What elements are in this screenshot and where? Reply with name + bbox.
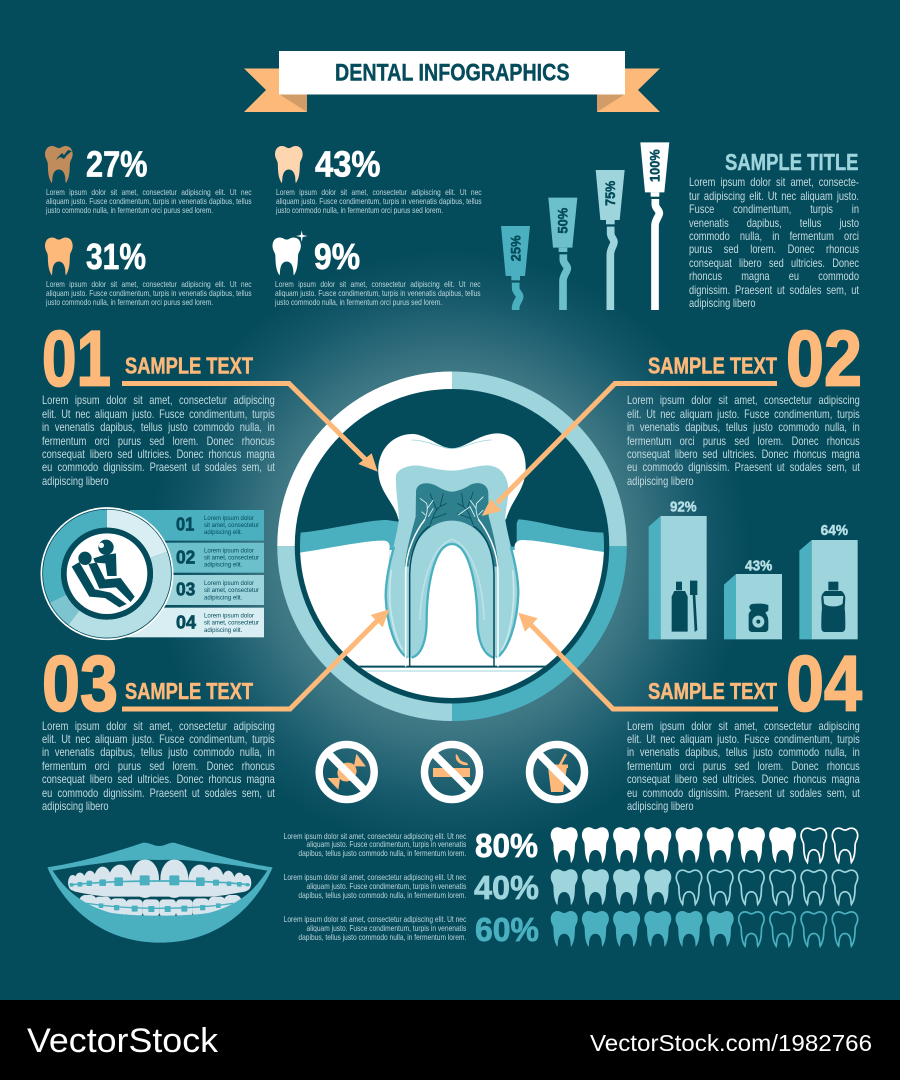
list band 03: adipiscing elit. [204, 594, 242, 601]
section 03 paragraph: eu commodo dignissim. Praesent ut sodales sem, ut [42, 787, 275, 800]
tube 100% [640, 142, 669, 310]
sample title paragraph [689, 176, 859, 310]
list band 04 [127, 608, 264, 637]
tooth row 80% [475, 827, 858, 864]
stat: 9% white tooth: 9% [314, 236, 360, 277]
section 04 heading: SAMPLE TEXT [648, 678, 777, 704]
tooth row text 40% [284, 872, 467, 900]
stat: 43% tooth [275, 144, 380, 185]
central radial glow [0, 230, 900, 870]
tube 25% [501, 226, 530, 310]
list band 01: adipiscing elit. [204, 529, 242, 536]
enamel crown [378, 433, 526, 519]
arrow 04 [518, 613, 778, 709]
list band 03: 03 [176, 579, 195, 600]
list band 01: Lorem ipsum dolor [204, 515, 255, 522]
stat text 27%: aliquam justo. Fusce condimentum, turpis in venenatis dapibus, tellus [46, 196, 252, 206]
section 03 heading [42, 638, 253, 728]
upper teeth [68, 859, 251, 898]
icon: dental chair [72, 540, 135, 607]
pulp [405, 483, 499, 567]
donut chart [41, 508, 173, 639]
section 03 paragraph [42, 720, 275, 813]
section 04 heading [648, 638, 862, 728]
list band 01: sit amet, consectetur [204, 522, 260, 529]
sample title paragraph: rhoncus magna eu commodo [689, 270, 859, 283]
footer bar: VectorStock [27, 1022, 219, 1060]
list band 02: 02 [176, 546, 195, 567]
title banner: DENTAL INFOGRAPHICS [335, 60, 570, 87]
tooth row 80%: 80% [475, 827, 538, 864]
section 01 heading: 01 [42, 314, 111, 402]
sample title heading: SAMPLE TITLE [725, 149, 858, 175]
list band 02 [130, 543, 264, 573]
braces [70, 875, 250, 912]
tooth cross-section [300, 433, 604, 700]
tube 100%: 100% [647, 149, 663, 182]
tooth row 60%: 60% [475, 911, 539, 948]
sample title paragraph: Lorem ipsum dolor sit amet, consecte- [689, 176, 859, 189]
sample title paragraph: dignissim. Praesent ut sodales sem, ut [689, 284, 859, 297]
tooth row text 40%: Lorem ipsum dolor sit amet, consectetur adipiscing elit. Ut nec [284, 872, 467, 882]
section 02 paragraph: in venenatis dapibus, tellus justo commodo nulla, in [627, 421, 860, 434]
tooth row 40%: 40% [474, 869, 539, 906]
nerve baseline [358, 666, 546, 668]
donut list panel [41, 508, 264, 639]
tube 25%: 25% [507, 235, 523, 261]
section 04 paragraph: elit. Ut nec aliquam justo. Fusce condimentum, turpis [627, 733, 860, 746]
section 03 heading: SAMPLE TEXT [125, 678, 253, 704]
section 03 paragraph: fermentum orci purus sed lorem. Donec rhoncus [42, 760, 275, 773]
bar 92% toothpaste [649, 500, 707, 639]
section 01 paragraph: consequat libero sed ultricies. Donec rhoncus magna [42, 448, 275, 461]
section 03 paragraph: in venenatis dapibus, tellus justo commodo nulla, in [42, 746, 275, 759]
section 01 paragraph [42, 394, 275, 488]
list band 02: adipiscing elit. [204, 562, 242, 569]
sample title paragraph: commodo nulla, in fermentum orci [689, 230, 859, 243]
stat: 27% decayed tooth: 27% [86, 144, 148, 185]
section 01 paragraph: in venenatis dapibus, tellus justo commodo nulla, in [42, 421, 275, 434]
tooth row text 60% [284, 914, 467, 942]
stat text 43%: Lorem ipsum dolor sit amet, consectetur adipiscing elit. Ut nec [276, 187, 482, 197]
tube 50% [548, 198, 577, 310]
section 04 paragraph: adipiscing libero [627, 800, 694, 813]
ring quadrants [286, 380, 618, 712]
tooth row text 60%: Lorem ipsum dolor sit amet, consectetur adipiscing elit. Ut nec [284, 914, 467, 924]
no candy icon [319, 744, 374, 800]
list band 04: adipiscing elit. [204, 627, 242, 634]
section 02 heading [648, 314, 862, 402]
lips [47, 843, 273, 943]
section 04 paragraph: fermentum orci purus sed lorem. Donec rhoncus [627, 760, 860, 773]
section 01 paragraph: fermentum orci purus sed lorem. Donec rhoncus [42, 435, 275, 448]
tube 75%: 75% [602, 180, 618, 206]
stat text 9% [274, 279, 481, 307]
canals [406, 519, 498, 667]
list band 03: sit amet, consectetur [204, 587, 260, 594]
tooth row text 80%: aliquam justo. Fusce condimentum, turpis in venenatis [307, 839, 467, 849]
tooth row 40% [474, 869, 858, 906]
no soda icon [530, 744, 584, 800]
list band 04: sit amet, consectetur [204, 620, 260, 627]
arrow 01 [122, 384, 378, 472]
stat text 31% [46, 279, 252, 307]
stat text 9%: Lorem ipsum dolor sit amet, consectetur adipiscing elit. Ut nec [275, 279, 481, 289]
tooth row 60% [475, 911, 858, 948]
lower teeth [79, 895, 241, 917]
arrow 03 [122, 609, 389, 709]
sample title paragraph: Fusce condimentum, turpis in [689, 203, 859, 216]
bar chart: hygiene products [649, 500, 858, 639]
stat text 27% [46, 187, 252, 215]
tooth row text 80% [284, 830, 467, 858]
cementum outlines [386, 544, 518, 658]
section 03 heading: 03 [42, 638, 118, 728]
arrow 02 [482, 384, 777, 516]
stat text 43%: aliquam justo. Fusce condimentum, turpis in venenatis dapibus, tellus [276, 196, 482, 206]
sample title paragraph: adipiscing libero [689, 297, 756, 310]
bar 64% mouthwash: 64% [821, 523, 848, 539]
list band 01 [130, 510, 264, 541]
sample title paragraph: venenatis dapibus, tellus justo [689, 217, 859, 230]
section 04 paragraph: eu commodo dignissim. Praesent ut sodales sem, ut [627, 787, 860, 800]
footer bar [0, 1000, 900, 1080]
bar 43% floss: 43% [745, 558, 772, 574]
section 02 paragraph [627, 394, 860, 488]
gums [300, 519, 604, 553]
stat text 43%: justo commodo nulla, in fermentum orci purus sed lorem. [276, 205, 443, 215]
section 02 paragraph: adipiscing libero [627, 475, 694, 488]
section 03 paragraph: elit. Ut nec aliquam justo. Fusce condimentum, turpis [42, 733, 275, 746]
tooth row text 80%: Lorem ipsum dolor sit amet, consectetur adipiscing elit. Ut nec [284, 830, 467, 840]
section 02 paragraph: consequat libero sed ultricies. Donec rhoncus magna [627, 448, 860, 461]
section 01 heading: SAMPLE TEXT [125, 353, 253, 379]
list band 02: Lorem ipsum dolor [204, 548, 255, 555]
tooth row text 40%: aliquam justo. Fusce condimentum, turpis in venenatis [307, 881, 467, 891]
stat: 31% tooth: 31% [86, 236, 146, 277]
tooth row text 80%: dapibus, tellus justo commodo nulla, in fermentum lorem. [299, 848, 467, 858]
toothpaste tubes chart [501, 142, 669, 310]
section 03 paragraph: Lorem ipsum dolor sit amet, consectetur adipiscing [42, 720, 275, 732]
section 02 paragraph: fermentum orci purus sed lorem. Donec rhoncus [627, 435, 860, 448]
section 04 paragraph: in venenatis dapibus, tellus justo commodo nulla, in [627, 746, 860, 759]
stat: 9% white tooth [272, 230, 360, 277]
stat: 43% tooth: 43% [315, 144, 380, 185]
dentin [386, 465, 518, 658]
list band 03 [130, 575, 264, 605]
stat text 31%: Lorem ipsum dolor sit amet, consectetur adipiscing elit. Ut nec [46, 279, 252, 289]
stat text 9%: aliquam justo. Fusce condimentum, turpis in venenatis dapibus, tellus [275, 288, 481, 298]
tooth diagram circle [286, 380, 618, 712]
list band 03: Lorem ipsum dolor [204, 580, 255, 587]
no smoking icon [424, 744, 480, 800]
smile with braces [47, 843, 273, 943]
section 02 heading: SAMPLE TEXT [648, 353, 777, 379]
section 04 heading: 04 [786, 638, 862, 728]
section 02 paragraph: Lorem ipsum dolor sit amet, consectetur adipiscing [627, 394, 860, 407]
stat text 31%: aliquam justo. Fusce condimentum, turpis in venenatis dapibus, tellus [46, 288, 252, 298]
stat text 9%: justo commodo nulla, in fermentum orci purus sed lorem. [275, 297, 442, 307]
stat text 43% [276, 187, 482, 215]
section 01 paragraph: elit. Ut nec aliquam justo. Fusce condimentum, turpis [42, 408, 275, 421]
bone [300, 540, 604, 700]
tube 75% [596, 170, 625, 310]
sample title paragraph: tur adipiscing elit. Ut nec aliquam justo. [689, 190, 859, 203]
section 01 paragraph: eu commodo dignissim. Praesent ut sodales sem, ut [42, 461, 275, 474]
stat: 27% decayed tooth [45, 144, 148, 185]
stat text 27%: Lorem ipsum dolor sit amet, consectetur adipiscing elit. Ut nec [46, 187, 252, 197]
section 01 heading [42, 314, 253, 402]
tooth row text 60%: aliquam justo. Fusce condimentum, turpis in venenatis [307, 923, 467, 933]
section 04 paragraph: consequat libero sed ultricies. Donec rhoncus magna [627, 773, 860, 786]
section 04 paragraph: Lorem ipsum dolor sit amet, consectetur adipiscing [627, 720, 860, 732]
stat text 27%: justo commodo nulla, in fermentum orci purus sed lorem. [46, 205, 213, 215]
sample title paragraph: purus sed lorem. Donec rhoncus [689, 243, 859, 256]
list band 01: 01 [176, 514, 194, 535]
section 01 paragraph: Lorem ipsum dolor sit amet, consectetur adipiscing [42, 394, 275, 407]
bar 43% floss [724, 558, 782, 639]
list band 04: Lorem ipsum dolor [204, 613, 255, 620]
section 02 paragraph: elit. Ut nec aliquam justo. Fusce condimentum, turpis [627, 408, 860, 421]
sample title paragraph: consequat libero sed ultricies. Donec [689, 257, 859, 270]
tooth row text 60%: dapibus, tellus justo commodo nulla, in fermentum lorem. [299, 932, 467, 942]
nerve branches [430, 492, 473, 525]
section 03 paragraph: consequat libero sed ultricies. Donec rhoncus magna [42, 773, 275, 786]
tooth row text 40%: dapibus, tellus justo commodo nulla, in fermentum lorem. [299, 890, 467, 900]
footer bar: VectorStock.com/1982766 [590, 1030, 872, 1056]
section 02 paragraph: eu commodo dignissim. Praesent ut sodales sem, ut [627, 461, 860, 474]
bar 92% toothpaste: 92% [670, 500, 697, 516]
list band 04: 04 [176, 611, 197, 632]
section 03 paragraph: adipiscing libero [42, 800, 109, 813]
section 04 paragraph [627, 720, 860, 813]
section 01 paragraph: adipiscing libero [42, 475, 109, 488]
section 02 heading: 02 [786, 314, 862, 402]
bar 64% mouthwash [799, 523, 858, 639]
tube 50%: 50% [555, 207, 571, 234]
list band 02: sit amet, consectetur [204, 555, 260, 562]
stat text 31%: justo commodo nulla, in fermentum orci purus sed lorem. [46, 297, 213, 307]
title banner [244, 51, 660, 112]
stat: 31% tooth [45, 236, 146, 277]
